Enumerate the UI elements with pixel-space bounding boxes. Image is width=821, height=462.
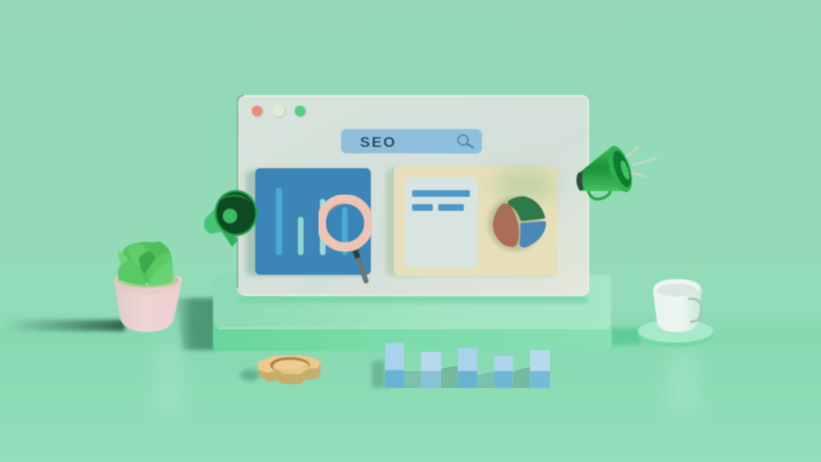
cup handle <box>688 299 702 322</box>
search term: SEO <box>360 134 396 151</box>
succulent leaves <box>118 241 173 286</box>
cup <box>653 279 702 332</box>
icon: coffee cup on saucer <box>638 279 713 348</box>
panel: blue bar chart card <box>246 168 371 276</box>
pie chart <box>488 196 546 251</box>
bar chart <box>276 188 348 255</box>
plant pot <box>114 276 182 332</box>
search bar <box>341 129 482 154</box>
icon: golden gear <box>257 356 321 384</box>
bar chart: floor blocks <box>385 343 550 388</box>
icon: search magnifier <box>458 135 473 148</box>
icon: left megaphone <box>204 190 258 247</box>
icon: right megaphone <box>576 143 656 199</box>
icon: potted succulent <box>114 241 182 332</box>
floor shadows and reflections <box>5 298 698 415</box>
panel: beige card <box>386 166 558 276</box>
window control dots <box>252 106 307 118</box>
browser window <box>237 95 589 296</box>
floor block shadows <box>372 360 530 388</box>
sound lines <box>625 147 656 176</box>
icon: magnifying glass <box>321 199 369 281</box>
platform front edge <box>213 320 612 351</box>
platform top <box>213 275 611 328</box>
saucer <box>638 320 713 348</box>
document card <box>405 177 478 268</box>
platform <box>213 275 612 351</box>
